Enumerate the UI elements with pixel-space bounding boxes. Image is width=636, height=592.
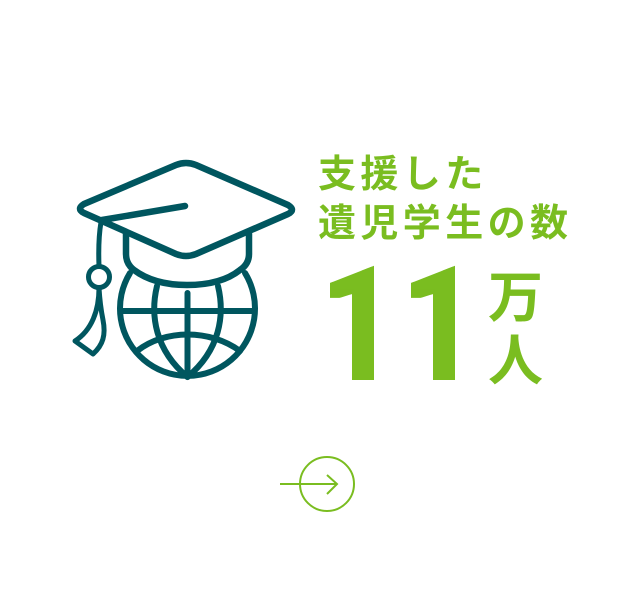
unit: people: 人 [488, 316, 543, 396]
big number: 11 [314, 204, 476, 424]
unit: man: 万 [488, 253, 543, 333]
tassel [75, 222, 110, 354]
globe [120, 273, 255, 377]
heading: line 2: 遺児学生の数 [318, 192, 572, 247]
cap [80, 163, 292, 285]
icon: arrow in circle [280, 456, 355, 512]
heading: line 1: 支援した [318, 143, 488, 198]
